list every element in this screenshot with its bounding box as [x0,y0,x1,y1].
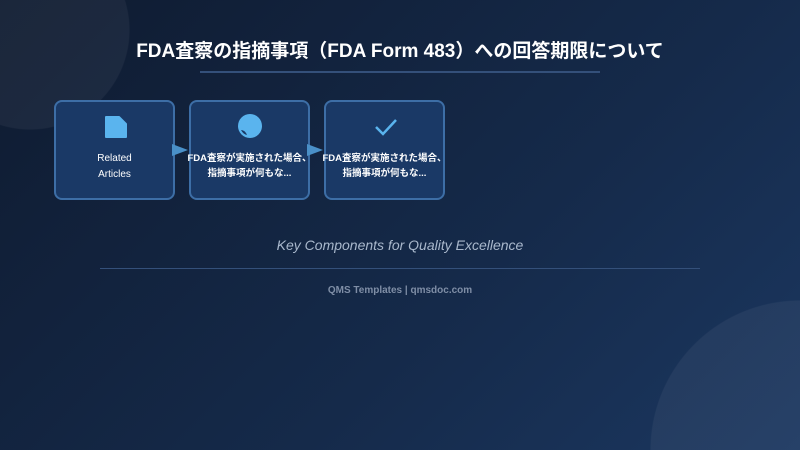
card: related articles: Related [97,153,132,164]
icon: document [105,116,127,138]
card: article 2: 指摘事項が何もな... [343,168,426,179]
icon: circle [238,114,262,138]
arrow 1 [172,144,188,156]
footer: QMS Templates | qmsdoc.com [328,285,472,296]
card: article 1 [189,100,310,200]
title: FDA査察の指摘事項（FDA Form 483）への回答期限について [136,41,664,62]
card: related articles: Articles [98,169,131,180]
icon: check [375,119,397,136]
arrow 2 [307,144,323,156]
card: article 1: FDA査察が実施された場合、 [187,153,312,164]
card: article 2 [324,100,445,200]
card: article 2: FDA査察が実施された場合、 [322,153,447,164]
card: article 1: 指摘事項が何もな... [208,168,291,179]
subtitle: Key Components for Quality Excellence [277,237,523,253]
card: related articles [54,100,175,200]
